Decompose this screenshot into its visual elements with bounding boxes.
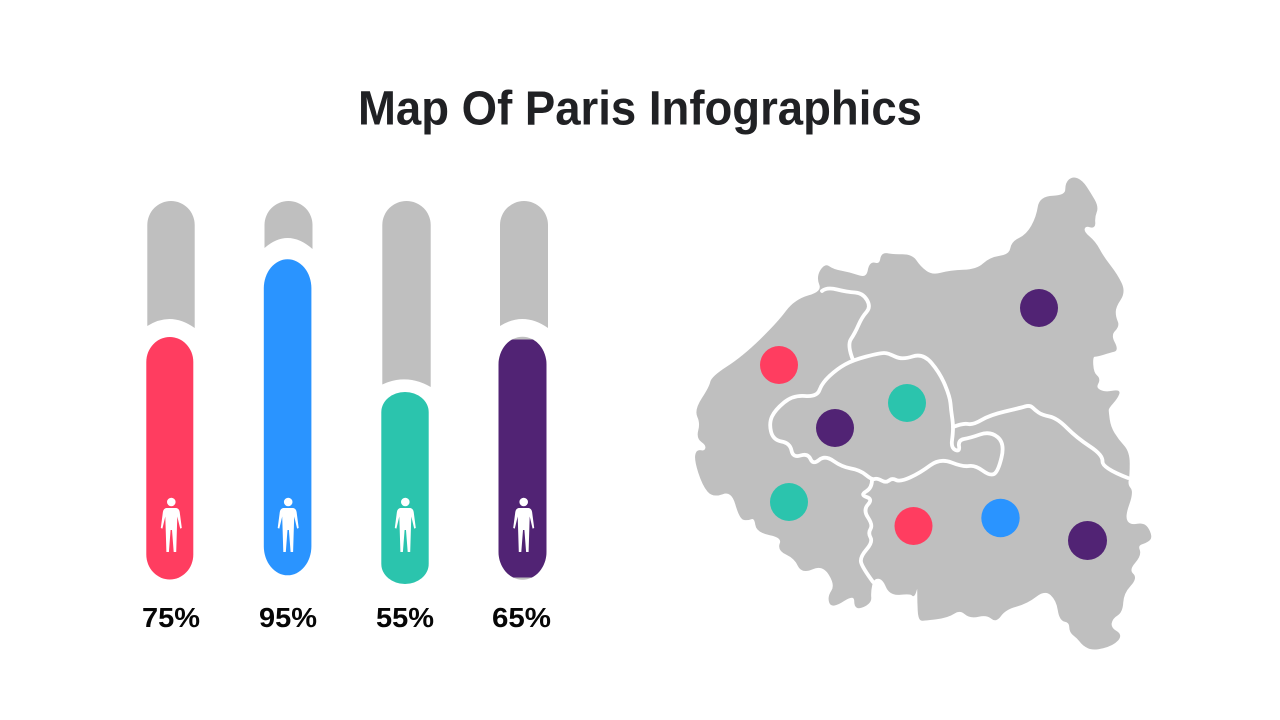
- label: 65%: 65%: [492, 602, 551, 633]
- icon: person: [161, 498, 182, 552]
- bar 2: 95%: [259, 201, 317, 633]
- label: 95%: 95%: [259, 602, 317, 633]
- marker: purple south-east: [1068, 521, 1107, 560]
- title: Map Of Paris Infographics: [358, 82, 922, 136]
- bar 4: 65%: [492, 201, 551, 633]
- marker: purple north-east: [1020, 289, 1058, 327]
- bar chart: population percentages: [142, 201, 551, 633]
- label: 75%: 75%: [142, 602, 200, 633]
- marker: green south-west: [770, 483, 808, 521]
- bar 1: 75%: [142, 201, 200, 633]
- icon: person: [513, 498, 534, 552]
- label: 55%: 55%: [376, 602, 434, 633]
- marker: red north-west: [760, 346, 798, 384]
- marker: blue south: [981, 499, 1020, 537]
- marker: red south: [894, 507, 932, 545]
- map of Paris: [696, 178, 1151, 649]
- map silhouette: [696, 178, 1151, 649]
- marker: green centre: [888, 384, 926, 422]
- icon: person: [278, 498, 299, 552]
- icon: person: [395, 498, 416, 552]
- region borders: [770, 289, 1128, 582]
- bar 3: 55%: [376, 201, 434, 633]
- marker: purple centre: [816, 409, 854, 447]
